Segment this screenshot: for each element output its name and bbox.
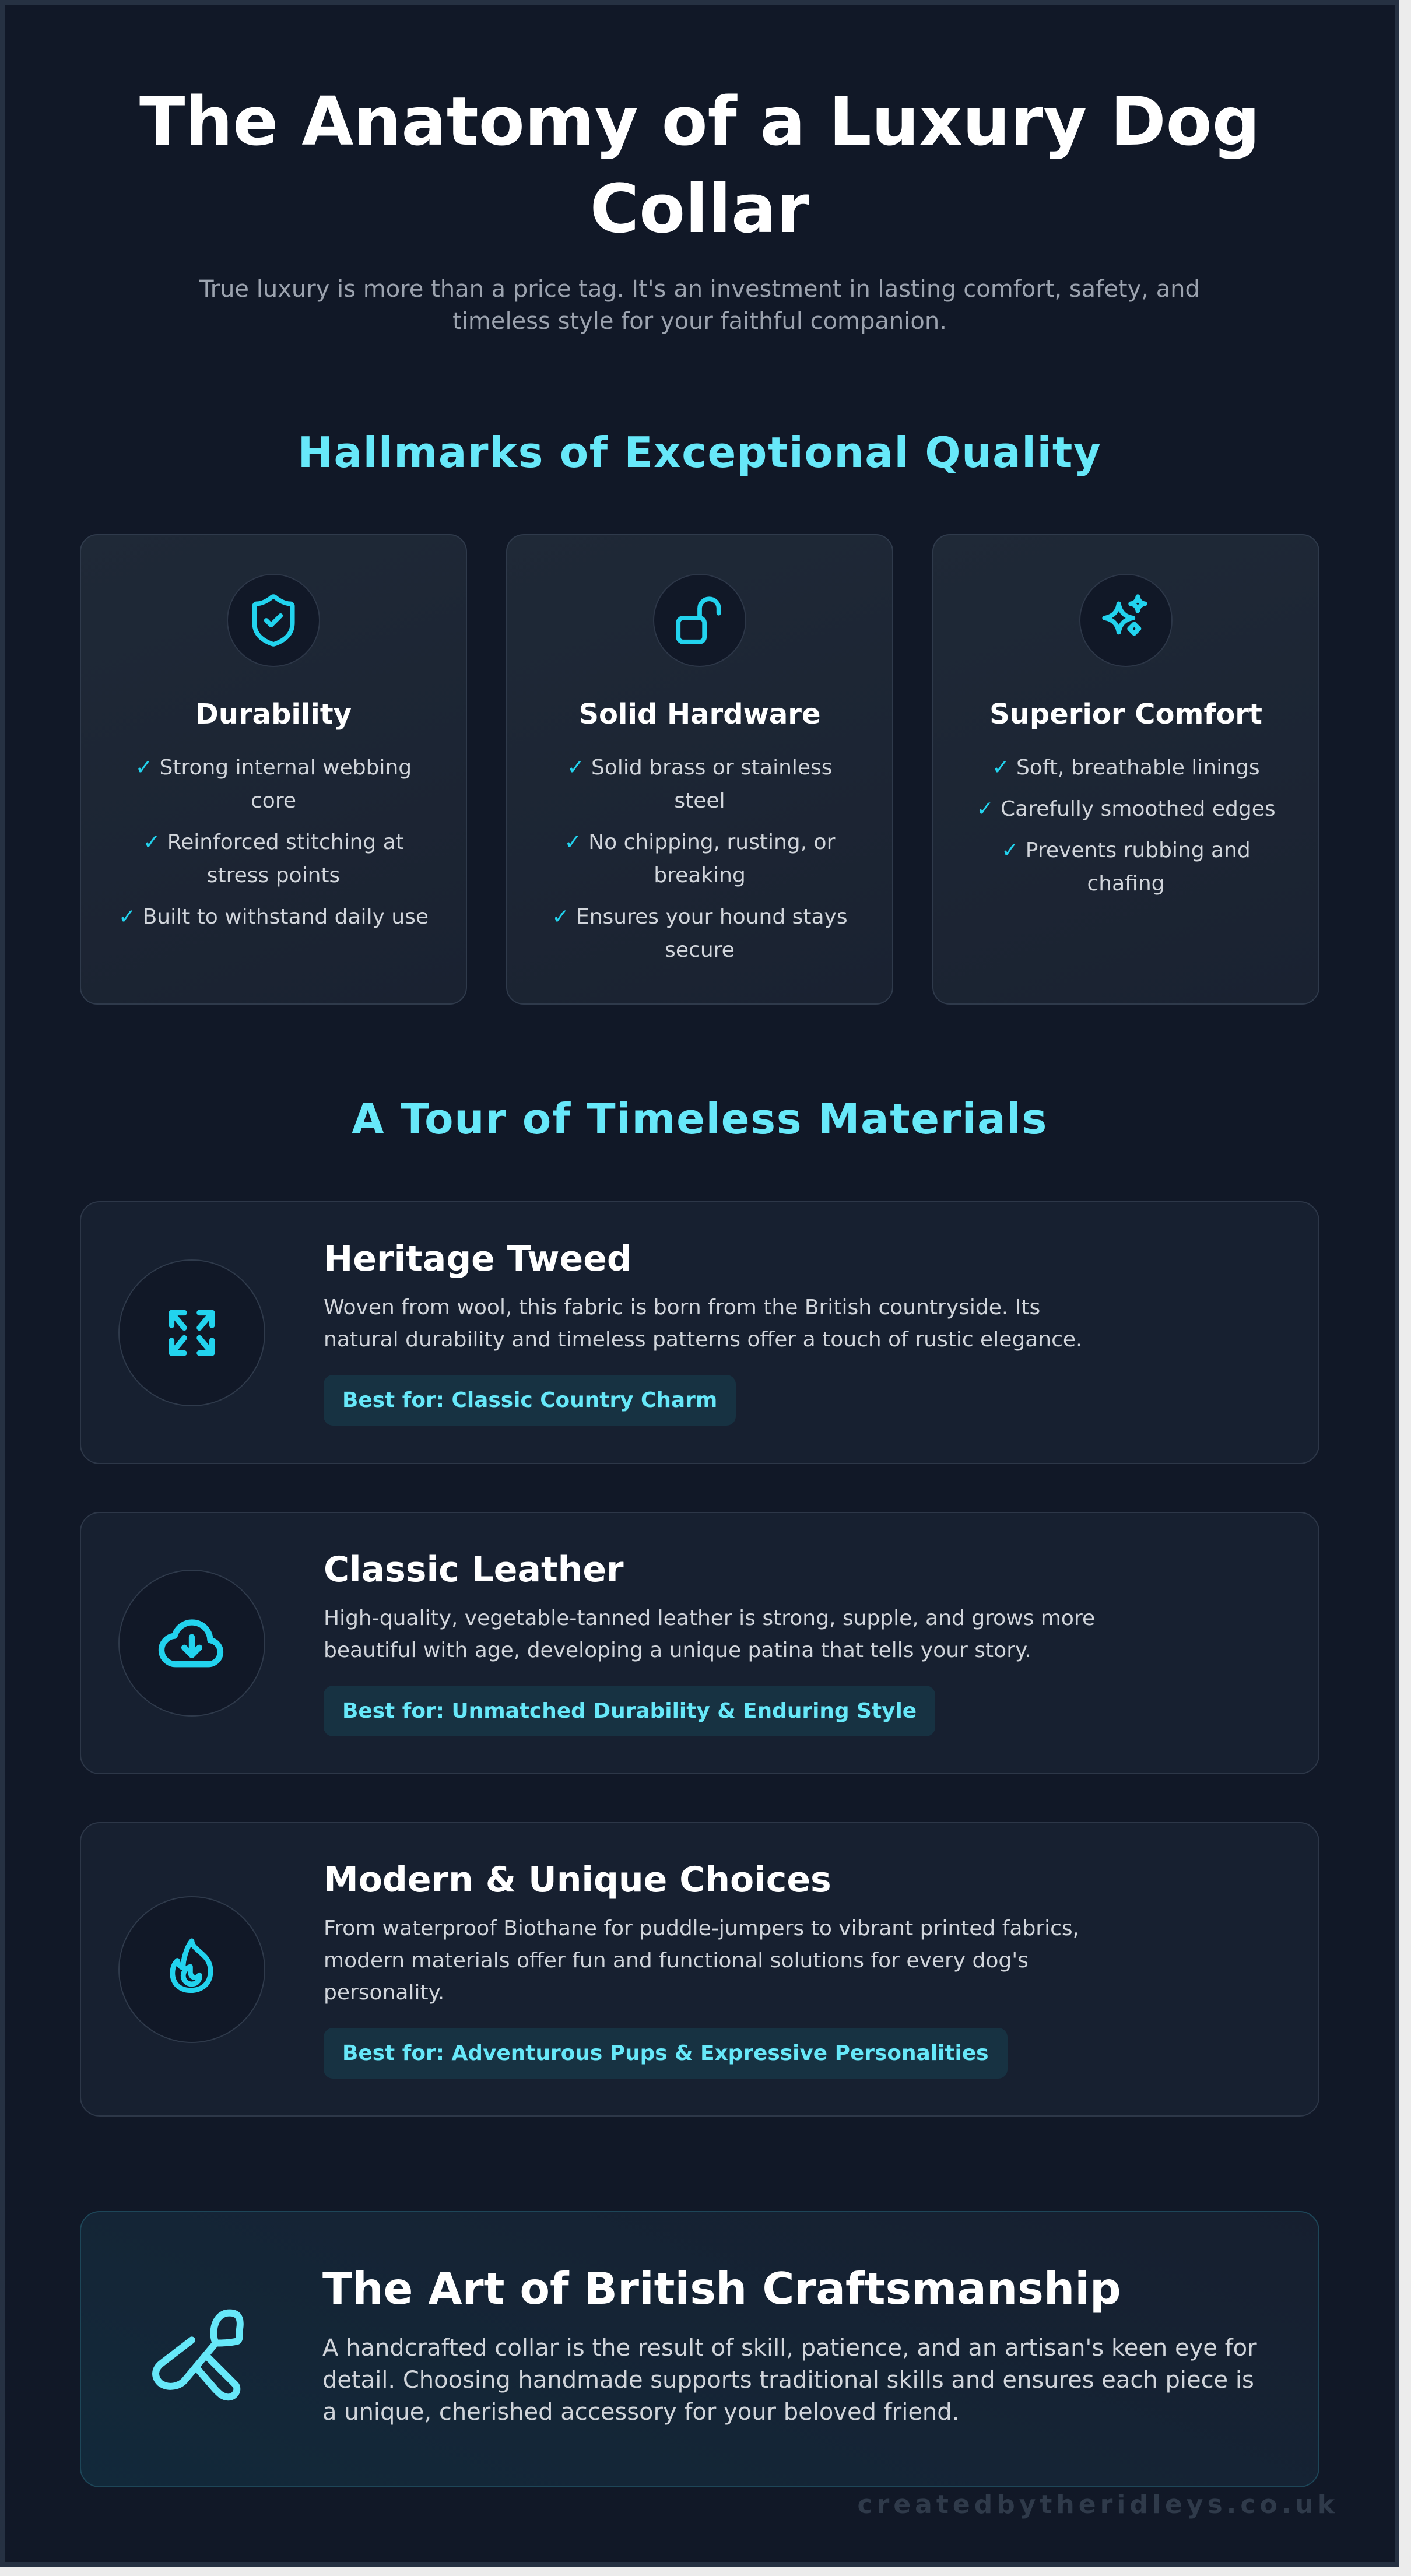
badge: Best for: Classic Country Charm (342, 1388, 717, 1412)
text block (324, 1859, 1079, 2079)
badge: Best for: Adventurous Pups & Expressive Personalities (342, 2041, 989, 2065)
text block: a unique, cherished accessory for your beloved friend. (322, 2399, 959, 2426)
list: ✓ Soft, breathable linings (992, 756, 1260, 780)
list: ✓ Built to withstand daily use (118, 905, 429, 929)
badge (324, 2028, 1008, 2078)
title: Collar (590, 170, 809, 248)
icon: cloud download (118, 1570, 265, 1717)
list: ✓ Prevents rubbing and (1001, 838, 1251, 862)
text block: High-quality, vegetable-tanned leather is strong, supple, and grows more (324, 1606, 1095, 1630)
text block: Modern & Unique Choices (324, 1859, 831, 1900)
title: The Anatomy of a Luxury Dog (139, 83, 1260, 161)
watermark: createdbytheridleys.co.uk (858, 2490, 1339, 2519)
badge: Best for: Unmatched Durability & Enduring Style (342, 1699, 917, 1722)
list (552, 756, 848, 962)
list: ✓ Solid brass or stainless (567, 756, 833, 780)
badge (324, 1375, 736, 1426)
text block: Heritage Tweed (324, 1238, 632, 1279)
panel: classic leather (80, 1512, 1319, 1774)
list (976, 756, 1276, 896)
heading: The Art of British Craftsmanship (322, 2263, 1121, 2314)
text block: detail. Choosing handmade supports traditional skills and ensures each piece is (322, 2367, 1254, 2393)
text block: personality. (324, 1980, 444, 2005)
list: breaking (654, 864, 746, 887)
icon: shield check (227, 574, 320, 667)
list: ✓ No chipping, rusting, or (564, 830, 835, 854)
list: stress points (207, 864, 340, 887)
heading: materials: A Tour of Timeless Materials (352, 1094, 1048, 1143)
icon: expand arrows (118, 1259, 265, 1406)
list: ✓ Carefully smoothed edges (976, 797, 1276, 821)
text block: Classic Leather (324, 1549, 624, 1589)
text block: A handcrafted collar is the result of skill, patience, and an artisan's keen eye for (322, 2335, 1257, 2361)
text block: modern materials offer fun and functional solutions for every dog's (324, 1949, 1029, 1972)
text block: natural durability and timeless patterns offer a touch of rustic elegance. (324, 1328, 1082, 1352)
badge (324, 1685, 935, 1736)
panel: british craftsmanship (80, 2211, 1319, 2487)
list (118, 756, 429, 929)
panel: solid hardware (506, 534, 893, 1005)
list: steel (674, 789, 725, 813)
list: secure (665, 938, 735, 962)
text block (322, 2335, 1257, 2426)
panel: superior comfort (932, 534, 1319, 1005)
icon: sparkles (1079, 574, 1173, 667)
panel: durability (80, 534, 467, 1005)
subtitle: timeless style for your faithful companion. (452, 308, 947, 335)
panel: heritage tweed (80, 1201, 1319, 1464)
panel: modern choices (80, 1822, 1319, 2117)
icon: tools (152, 2309, 244, 2401)
heading: Durability (195, 698, 352, 731)
list: core (251, 789, 296, 813)
title (139, 83, 1260, 248)
list: ✓ Ensures your hound stays (552, 905, 848, 929)
text block: beautiful with age, developing a unique patina that tells your story. (324, 1638, 1031, 1662)
text block: From waterproof Biothane for puddle-jumpers to vibrant printed fabrics, (324, 1916, 1079, 1940)
list: ✓ Reinforced stitching at (143, 830, 404, 854)
text block (324, 1549, 1095, 1736)
heading: hallmarks: Hallmarks of Exceptional Quality (298, 428, 1101, 477)
icon: open padlock (653, 574, 746, 667)
list: ✓ Strong internal webbing (135, 756, 412, 780)
icon: flame (118, 1896, 265, 2043)
text block (324, 1238, 1082, 1426)
text block: Woven from wool, this fabric is born from the British countryside. Its (324, 1296, 1040, 1319)
heading: Solid Hardware (578, 698, 821, 731)
list: chafing (1087, 872, 1165, 896)
heading: Superior Comfort (989, 698, 1262, 731)
subtitle: True luxury is more than a price tag. It's an investment in lasting comfort, safety, and (199, 276, 1200, 303)
subtitle (199, 276, 1200, 335)
